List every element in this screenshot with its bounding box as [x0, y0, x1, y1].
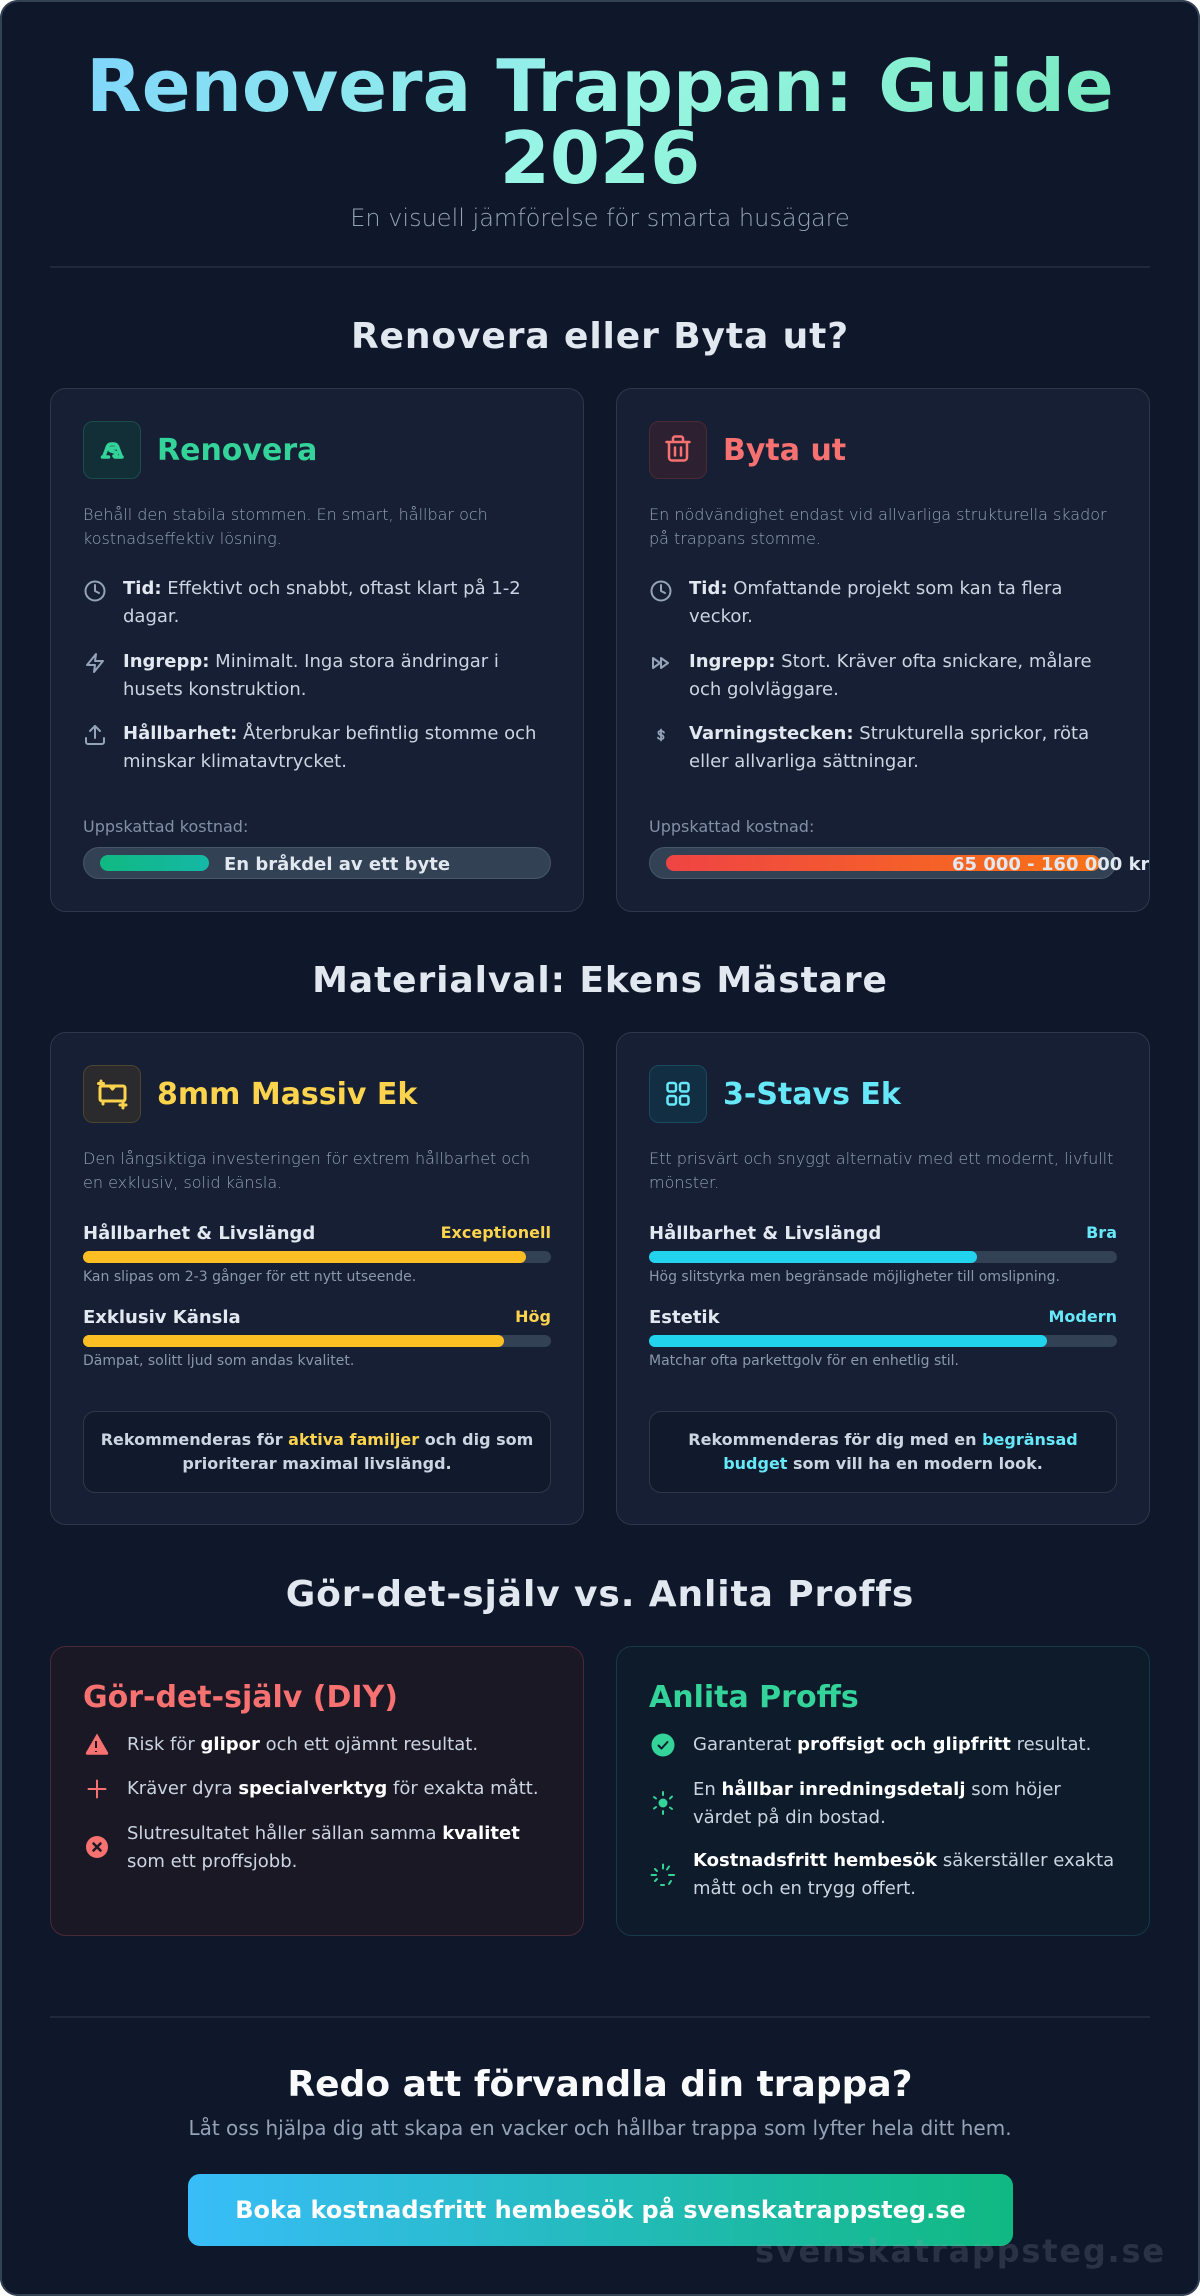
panel: 3-Stavs Ek — [616, 1032, 1150, 1525]
metric value: Hög — [515, 1307, 551, 1326]
list item: Varningstecken: Varningstecken: Strukturella sprickor, röta — [689, 723, 1089, 744]
heading: Renovera eller Byta ut: Renovera eller Byta ut? — [351, 316, 849, 357]
item: kostnadsfritt hembesök — [693, 1850, 1114, 1899]
watermark: svenskatrappsteg.se — [755, 2232, 1166, 2270]
icon: bolt — [86, 653, 104, 673]
icon: fast forward — [652, 657, 669, 669]
item: hållbar inredningsdetalj: En hållbar inredningsdetalj som höjer — [693, 1778, 1061, 1800]
description — [83, 1148, 530, 1192]
card title: 3-Stavs Ek — [723, 1076, 901, 1112]
card title: 8mm Massiv Ek — [157, 1076, 417, 1112]
metric note: Matchar ofta parkettgolv för en enhetlig stil. — [649, 1353, 959, 1369]
cost label: Uppskattad kostnad: — [649, 816, 814, 836]
icon: loader — [650, 1864, 675, 1886]
list item: Tid: Tid: Effektivt och snabbt, oftast klart på 1-2 — [123, 578, 521, 599]
cost pill — [83, 847, 551, 879]
list item: Varningstecken — [689, 723, 1089, 772]
title: 2026 — [500, 116, 700, 200]
description: mönster. — [649, 1172, 719, 1192]
cost value: En bråkdel av ett byte — [224, 854, 450, 875]
icon: trash — [649, 421, 707, 479]
item: kvalitet: Slutresultatet håller sällan samma kvalitet — [127, 1822, 520, 1844]
description: Behåll den stabila stommen. En smart, hållbar och — [83, 504, 488, 524]
heading: Materialval: Materialval: Ekens Mästare — [312, 960, 888, 1001]
list item: Ingrepp: och golvläggare. — [689, 679, 839, 700]
list item: Tid: Tid: Omfattande projekt som kan ta flera — [689, 578, 1062, 599]
list item: Tid: dagar. — [123, 606, 179, 627]
item: kostnadsfritt hembesök: mått och en trygg offert. — [693, 1878, 916, 1899]
metric label: Hållbarhet & Livslängd — [83, 1223, 315, 1244]
metric note: Kan slipas om 2-3 gånger för ett nytt utseende. — [83, 1269, 416, 1285]
list item: Hållbarhet — [123, 722, 536, 772]
subtitle: En visuell jämförelse för smarta husägare — [350, 204, 850, 232]
list item: Tid: veckor. — [689, 606, 753, 627]
metric value: Exceptionell — [441, 1223, 551, 1242]
panel: Gör-det-själv — [50, 1646, 584, 1936]
list item: Ingrepp: Ingrepp: Minimalt. Inga stora ändringar i — [123, 650, 499, 672]
icon: renovera — [83, 421, 141, 479]
item: hållbar inredningsdetalj — [693, 1778, 1061, 1828]
item: glipor: Risk för glipor och ett ojämnt resultat. — [127, 1734, 478, 1754]
metric value: Modern — [1048, 1307, 1117, 1326]
call to action text: Låt oss hjälpa dig att skapa en vacker och hållbar trappa som lyfter hela ditt hem. — [188, 2116, 1012, 2140]
icon: clock — [650, 580, 672, 602]
panel: Renovera — [50, 388, 584, 912]
card title: Renovera — [157, 433, 317, 468]
title: Renovera Trappan: Guide — [86, 44, 1114, 128]
list item: Hållbarhet: minskar klimatavtrycket. — [123, 751, 347, 772]
icon: upload — [85, 725, 105, 745]
icon: massive oak — [83, 1065, 141, 1123]
recommendation: Rekommenderas för dig med en begränsad — [688, 1430, 1078, 1448]
description: en exklusiv, solid känsla. — [83, 1172, 282, 1192]
metric note: Hög slitstyrka men begränsade möjligheter till omslipning. — [649, 1269, 1060, 1285]
card title: Anlita Proffs — [649, 1680, 859, 1714]
metric note: Dämpat, solitt ljud som andas kvalitet. — [83, 1353, 354, 1369]
recommendation: Rekommenderas för aktiva familjer och dig som — [101, 1430, 533, 1448]
description: på trappans stomme. — [649, 528, 821, 548]
description — [649, 1148, 1113, 1192]
recommendation — [83, 1411, 551, 1493]
icon: warning — [86, 1734, 108, 1755]
item: kvalitet: som ett proffsjobb. — [127, 1851, 297, 1872]
card title: Byta ut — [723, 433, 846, 468]
list item: Tid — [123, 578, 521, 627]
panel: Byta ut — [616, 388, 1150, 912]
metric label: Hållbarhet & Livslängd — [649, 1223, 881, 1244]
description: En nödvändighet endast vid allvarliga strukturella skador — [649, 504, 1107, 524]
list item: Ingrepp: Ingrepp: Stort. Kräver ofta snickare, målare — [689, 650, 1092, 672]
metric label: Exklusiv Känsla — [83, 1307, 241, 1328]
description: Ett prisvärt och snyggt alternativ med ett modernt, livfullt — [649, 1148, 1113, 1168]
metric bar — [649, 1251, 1117, 1263]
recommendation: prioriterar maximal livslängd. — [182, 1454, 452, 1472]
list item: Varningstecken: eller allvarliga sättningar. — [689, 751, 919, 772]
icon: check — [652, 1734, 674, 1756]
icon: grid — [649, 1065, 707, 1123]
item: proffsigt: Garanterat proffsigt och glipfritt resultat. — [693, 1734, 1091, 1754]
metric value: Bra — [1086, 1223, 1117, 1242]
list item: Ingrepp — [123, 650, 499, 700]
list item: Ingrepp: husets konstruktion. — [123, 679, 306, 700]
metric bar — [83, 1335, 551, 1347]
panel: 8mm Massiv Ek — [50, 1032, 584, 1525]
metric bar — [83, 1251, 551, 1263]
metric label: Estetik — [649, 1307, 720, 1328]
card title: Gör-det-själv (DIY) — [83, 1680, 398, 1714]
title — [50, 50, 1150, 194]
item: kostnadsfritt hembesök: Kostnadsfritt hembesök säkerställer exakta — [693, 1850, 1114, 1871]
call to action heading: Redo att förvandla din trappa? — [287, 2064, 913, 2105]
description: kostnadseffektiv lösning. — [83, 528, 282, 548]
cost pill — [649, 847, 1116, 879]
description: Den långsiktiga investeringen för extrem hållbarhet och — [83, 1148, 530, 1168]
icon: error circle — [86, 1836, 108, 1858]
icon: sun — [653, 1791, 673, 1815]
recommendation: budget som vill ha en modern look. — [723, 1454, 1043, 1472]
icon: dollar — [657, 728, 665, 742]
item: hållbar inredningsdetalj: värdet på din bostad. — [693, 1807, 886, 1828]
cost bar fill — [100, 855, 209, 871]
call to action button: Boka kostnadsfritt hembesök på svenskatrappsteg.se — [235, 2196, 966, 2224]
item: specialverktyg: Kräver dyra specialverktyg för exakta mått. — [127, 1778, 539, 1798]
item: kvalitet — [127, 1822, 520, 1872]
metric bar — [649, 1335, 1117, 1347]
cost bar fill — [666, 855, 1100, 871]
cost value: 65 000 - 160 000 kr — [952, 854, 1149, 875]
icon: plus — [88, 1780, 106, 1798]
cost label: Uppskattad kostnad: — [83, 816, 248, 836]
recommendation — [649, 1411, 1117, 1493]
list item: Ingrepp — [689, 650, 1092, 700]
description — [83, 504, 488, 548]
panel: Anlita Proffs — [616, 1646, 1150, 1936]
list item: Hållbarhet: Hållbarhet: Återbrukar befintlig stomme och — [123, 723, 536, 744]
icon: clock — [84, 580, 106, 602]
description — [649, 504, 1107, 548]
call to action button — [188, 2174, 1013, 2246]
list item: Tid — [689, 578, 1062, 627]
heading: Gör-det-själv vs Proffs: Gör-det-själv vs. Anlita Proffs — [286, 1574, 914, 1615]
